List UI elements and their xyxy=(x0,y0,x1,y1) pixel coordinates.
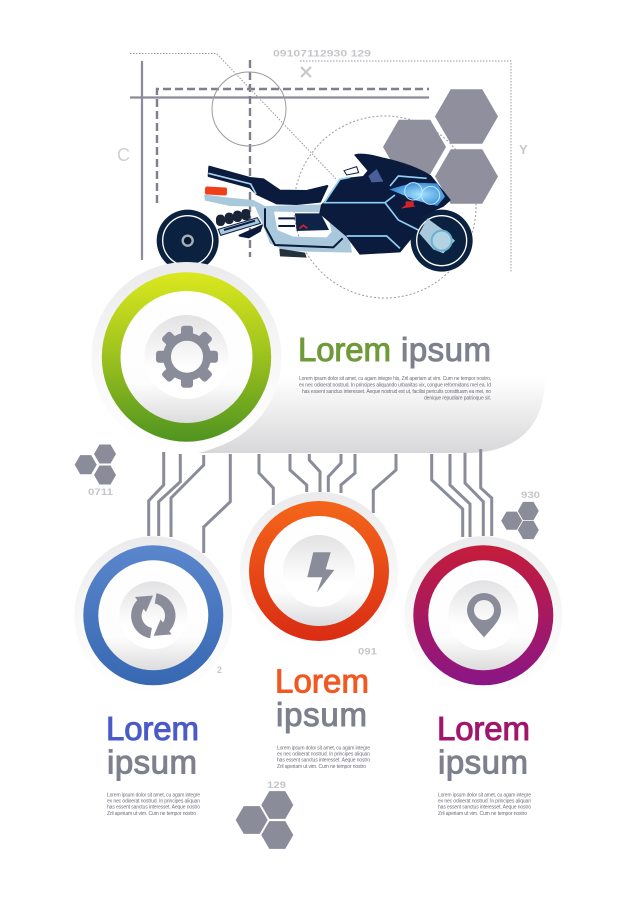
badge: blue refresh xyxy=(74,536,232,694)
heading: green Lorem ipsum xyxy=(298,331,491,368)
column: blue text: has essent sanctus interesset. Aeque nostro xyxy=(107,805,200,811)
column: blue text: ex nec odioerat nostrud. In principes aliquan xyxy=(107,798,200,804)
column: orange text: Lorem ipsum dolor sit amet, cu agam integre xyxy=(277,745,370,751)
heading: green Lorem ipsum: Lorem xyxy=(298,331,391,368)
small hexagons bottom xyxy=(236,780,293,849)
large hexagon cluster xyxy=(383,89,498,204)
column: blue text: Lorem ipsum dolor sit amet, cu agam integre xyxy=(107,792,200,798)
text block: main description xyxy=(299,376,491,401)
small hexagons left: 0711 xyxy=(88,487,113,497)
column: purple text: has essent sanctus interesset. Aeque nostro xyxy=(438,805,531,811)
label: 091: 091 xyxy=(358,646,377,656)
small hexagons right xyxy=(501,490,540,539)
column: purple text: Lorem ipsum dolor sit amet, cu agam integre xyxy=(438,792,531,798)
text block: main description: Lorem ipsum dolor sit amet, cu agam integre his, Zril aperiam ut vim. Cum ne tempor nostro, xyxy=(299,376,491,382)
blueprint background: Y xyxy=(519,142,528,157)
text block: main description: has essent sanctus interesset. Aeque nostrud est ut, facilisi periculis constituam ea mei, no xyxy=(302,389,491,395)
column: purple text: Zril aperiam ut vim. Cum ne tempor nostro xyxy=(438,811,527,817)
blueprint background: 09107112930 129 xyxy=(273,48,371,58)
circuit traces xyxy=(149,449,492,553)
motorcycle illustration xyxy=(157,154,473,272)
column: orange text xyxy=(275,662,370,770)
icon: lightning bolt xyxy=(307,552,334,593)
column: blue text: Lorem xyxy=(106,710,199,747)
badge: green gear xyxy=(92,262,282,452)
column: purple text: ex nec odioerat nostrud. In principes aliquan xyxy=(438,798,531,804)
small hexagons right: 930 xyxy=(521,490,540,500)
text block: main description: ex nec odioerat nostrud. In principes aliquando urbanitas vix, congue reformidans mel ea. Id xyxy=(299,382,491,388)
icon: gear xyxy=(156,326,218,388)
icon: location pin xyxy=(467,593,501,637)
column: purple text xyxy=(437,710,531,817)
badge: purple pin xyxy=(404,536,562,694)
column: purple text: ipsum xyxy=(438,744,528,780)
heading: green Lorem ipsum: ipsum xyxy=(401,331,491,368)
column: purple text: Lorem xyxy=(437,710,530,747)
label: 2: 2 xyxy=(217,665,222,675)
column: orange text: has essent sanctus interesset. Aeque nostro xyxy=(277,758,370,764)
small hexagons bottom: 129 xyxy=(267,780,286,790)
column: orange text: ipsum xyxy=(276,696,367,733)
badge: red lightning xyxy=(240,492,398,650)
panel: main grey cloud xyxy=(198,300,545,453)
text block: main description: denique repudiare patrioque sit. xyxy=(424,395,491,401)
blueprint background xyxy=(117,48,528,298)
column: orange text: ex nec odioerat nostrud. In principes aliquan xyxy=(277,751,370,757)
small hexagons left xyxy=(75,444,116,497)
blueprint background: C xyxy=(117,145,130,165)
column: orange text: Zril aperiam ut vim. Cum ne tempor nostro xyxy=(277,764,366,770)
column: blue text: ipsum xyxy=(107,744,197,780)
column: blue text: Zril aperiam ut vim. Cum ne tempor nostro xyxy=(107,811,196,817)
column: blue text xyxy=(106,710,200,817)
icon: refresh arrows xyxy=(135,596,172,636)
column: orange text: Lorem xyxy=(275,662,369,700)
